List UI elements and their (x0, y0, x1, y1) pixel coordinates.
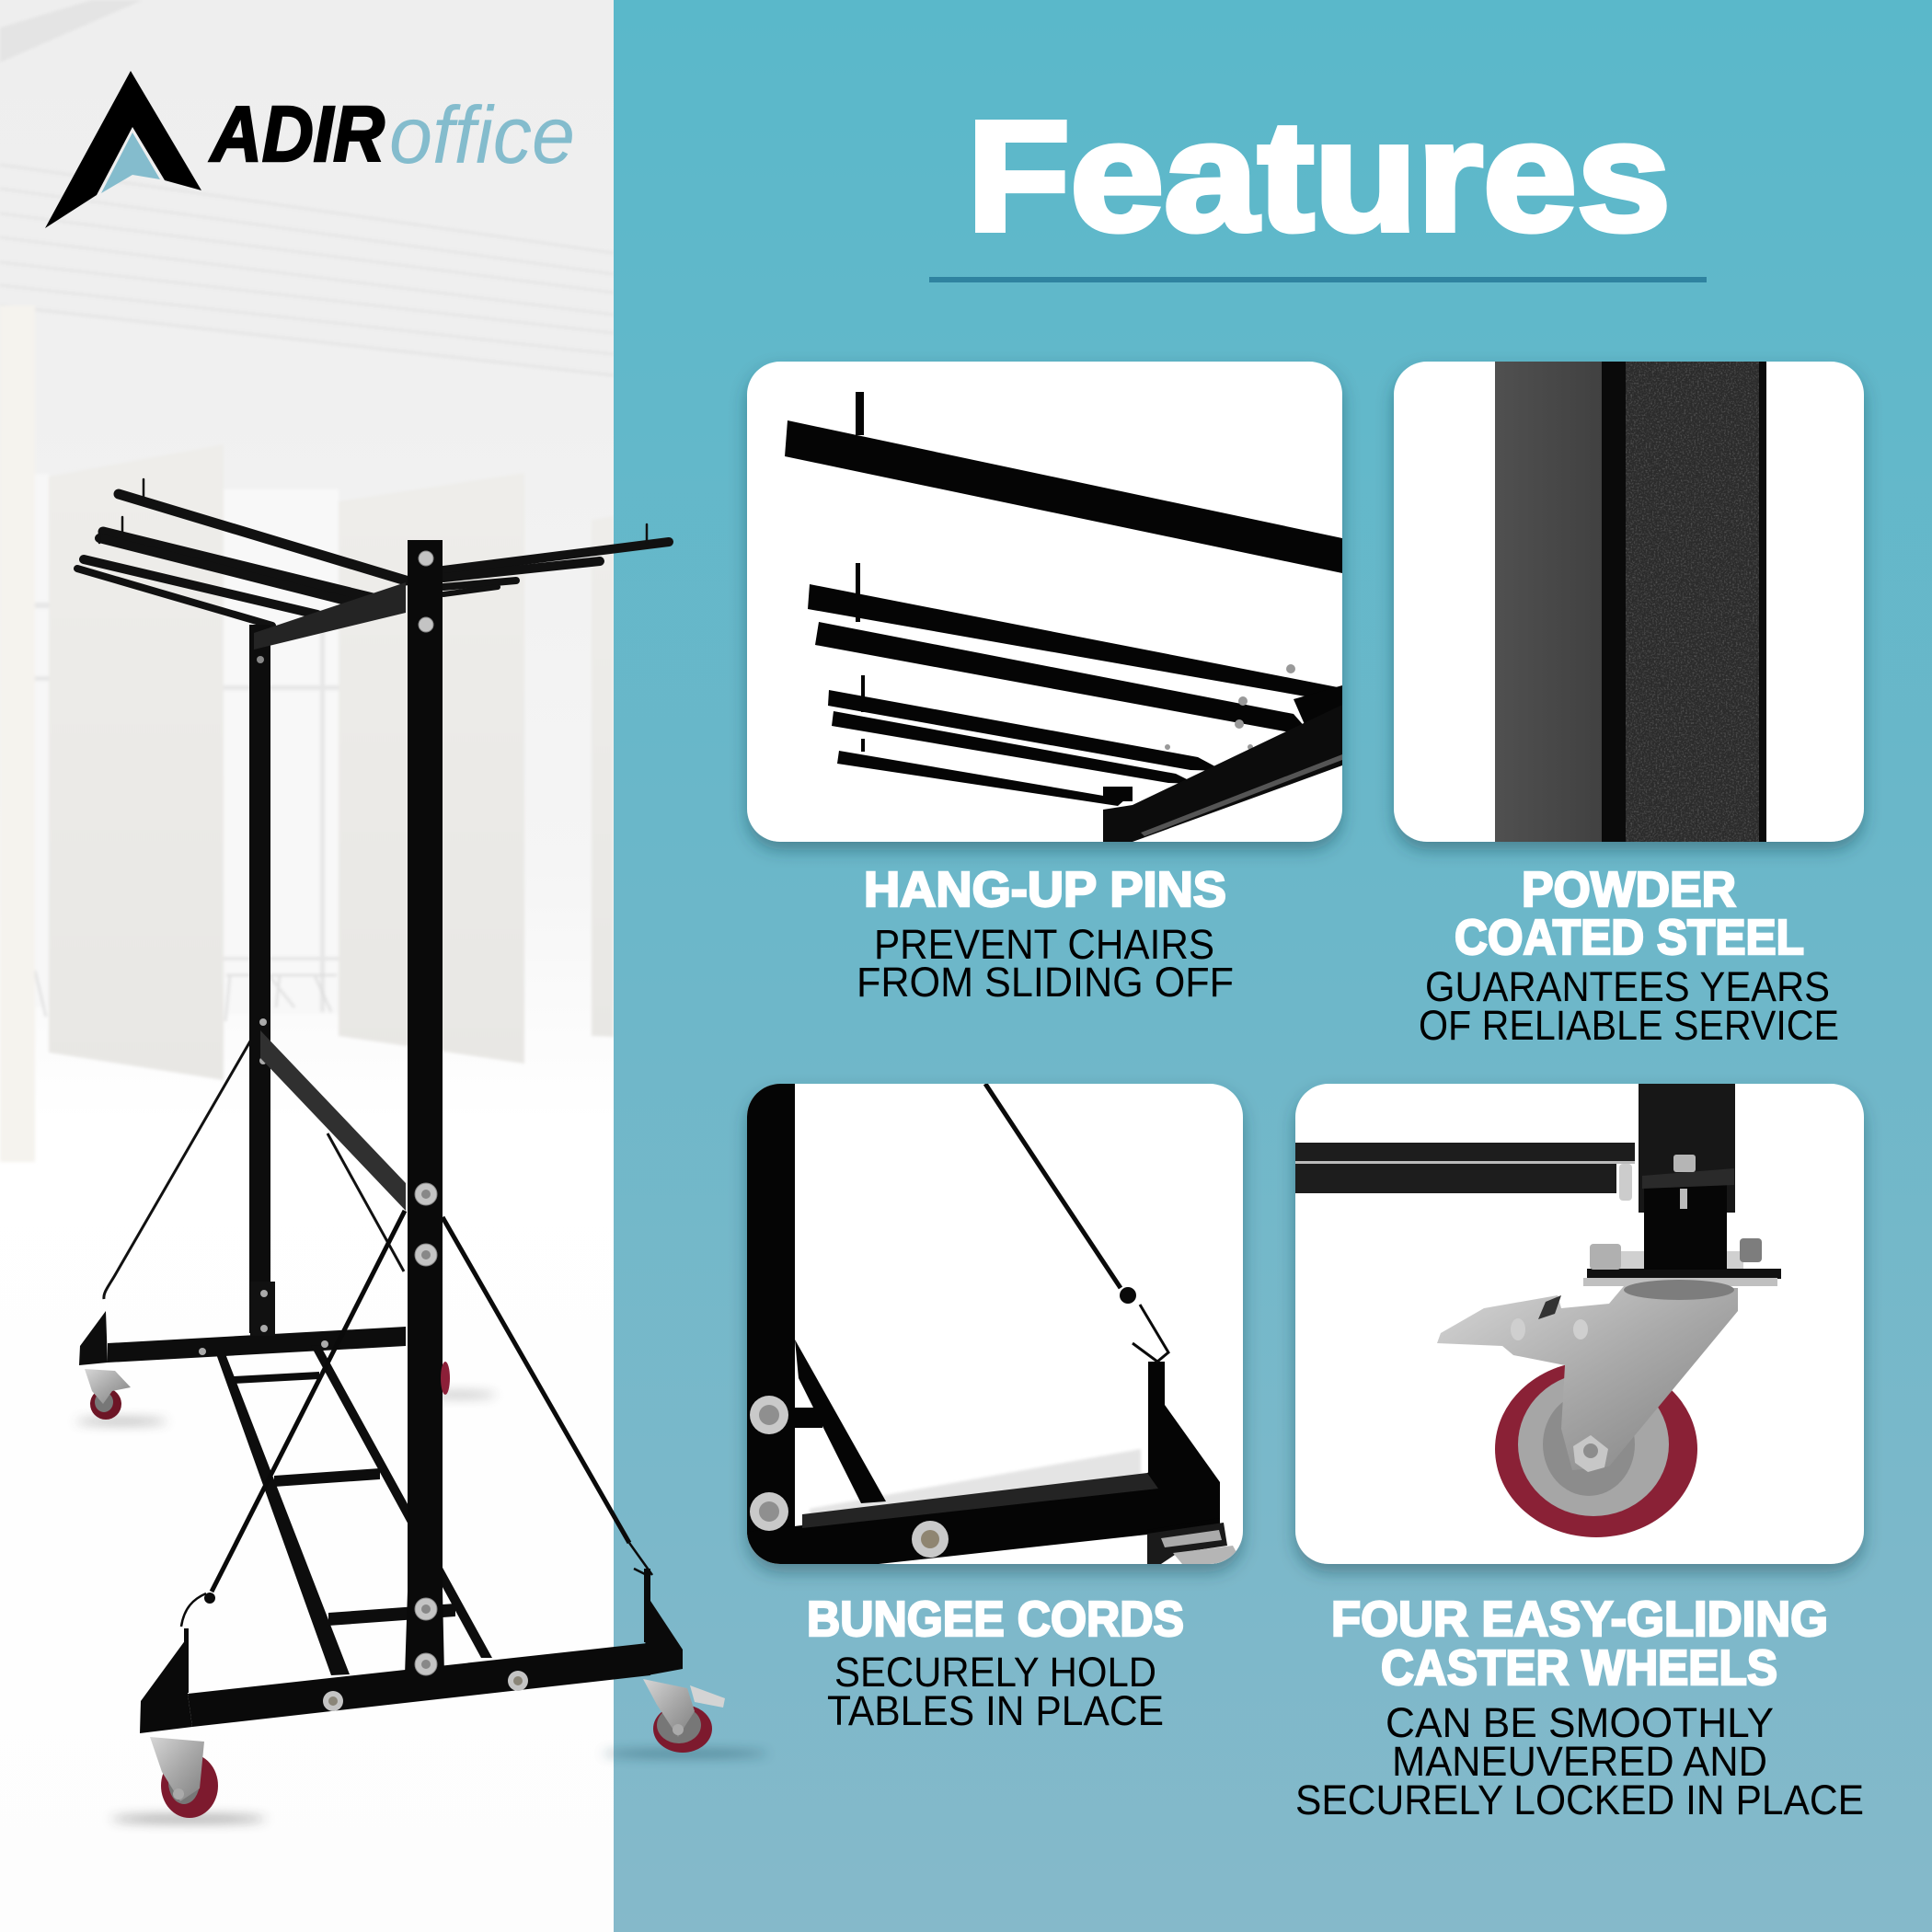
title underline (929, 277, 1707, 282)
description: OF RELIABLE SERVICE (1419, 1002, 1839, 1049)
description: TABLES IN PLACE (827, 1687, 1164, 1734)
heading: HANG-UP PINS (864, 862, 1226, 917)
bolts (750, 1396, 949, 1558)
fork and brake (1437, 1280, 1738, 1472)
heading: FOUR EASY-GLIDING (1331, 1592, 1828, 1647)
wheel (1495, 1361, 1697, 1537)
panel: bungee cords photo (736, 1084, 1243, 1564)
panel: hang-up pins photo (747, 362, 1342, 842)
description: SECURELY HOLD (834, 1649, 1156, 1696)
description (1295, 1699, 1864, 1823)
description: MANEUVERED AND (1392, 1738, 1767, 1785)
frame bars (1295, 1084, 1735, 1233)
frame (736, 1084, 1220, 1564)
description: CAN BE SMOOTHLY (1386, 1699, 1774, 1746)
description: SECURELY LOCKED IN PLACE (1295, 1777, 1864, 1823)
rack: front base (140, 1569, 683, 1733)
caption: caster wheels (1295, 1592, 1864, 1823)
caption: hang-up pins (857, 862, 1234, 1006)
rods and pins (785, 392, 1342, 806)
rack: diagonal brace (260, 1030, 406, 1211)
logo wordmark ADIR: ADIR (209, 91, 385, 178)
heading (1455, 862, 1804, 965)
heading: CASTER WHEELS (1381, 1640, 1777, 1696)
heading: COATED STEEL (1455, 910, 1804, 965)
panel: office photo background (0, 0, 614, 1932)
rack: top arm (254, 582, 406, 650)
steel post faces (1495, 362, 1766, 842)
bungee cord and hook (985, 1084, 1168, 1362)
shadow under front right caster (603, 1750, 768, 1757)
rack: bungee cords back (104, 1040, 404, 1299)
panel: teal background (614, 0, 1932, 1932)
rack: front left caster (150, 1737, 218, 1818)
caster fragment (1147, 1523, 1243, 1564)
support arm (1103, 705, 1342, 842)
product: folding rack (77, 479, 725, 1818)
mounting plate (1583, 1238, 1781, 1286)
rack: bungee cords front (181, 1211, 652, 1627)
panel: caster wheel photo (1295, 1084, 1864, 1564)
heading: POWDER (1522, 862, 1736, 917)
panel: powder coated steel photo (1394, 362, 1864, 842)
icon: logo arrow (45, 71, 201, 228)
rack: main post (405, 540, 444, 1675)
rack: front right caster (643, 1679, 725, 1753)
heading: BUNGEE CORDS (807, 1592, 1184, 1647)
description (827, 1649, 1164, 1734)
rack: rear rods (77, 479, 669, 626)
rack: rear post (199, 625, 328, 1355)
description: PREVENT CHAIRS (874, 921, 1214, 968)
title: Features (967, 89, 1671, 264)
rack: rear left caster (85, 1369, 131, 1420)
description (1419, 963, 1839, 1049)
rack: rear base and ladder (79, 1311, 492, 1675)
description (857, 921, 1234, 1006)
caption: bungee cords (807, 1592, 1184, 1734)
rack: rear right caster (441, 1362, 450, 1395)
heading (1331, 1592, 1828, 1696)
description: FROM SLIDING OFF (857, 959, 1234, 1006)
description: GUARANTEES YEARS (1425, 963, 1830, 1010)
logo wordmark office: office (389, 89, 575, 180)
logo: AdirOffice (45, 71, 575, 228)
caption: powder coated steel (1419, 862, 1839, 1049)
